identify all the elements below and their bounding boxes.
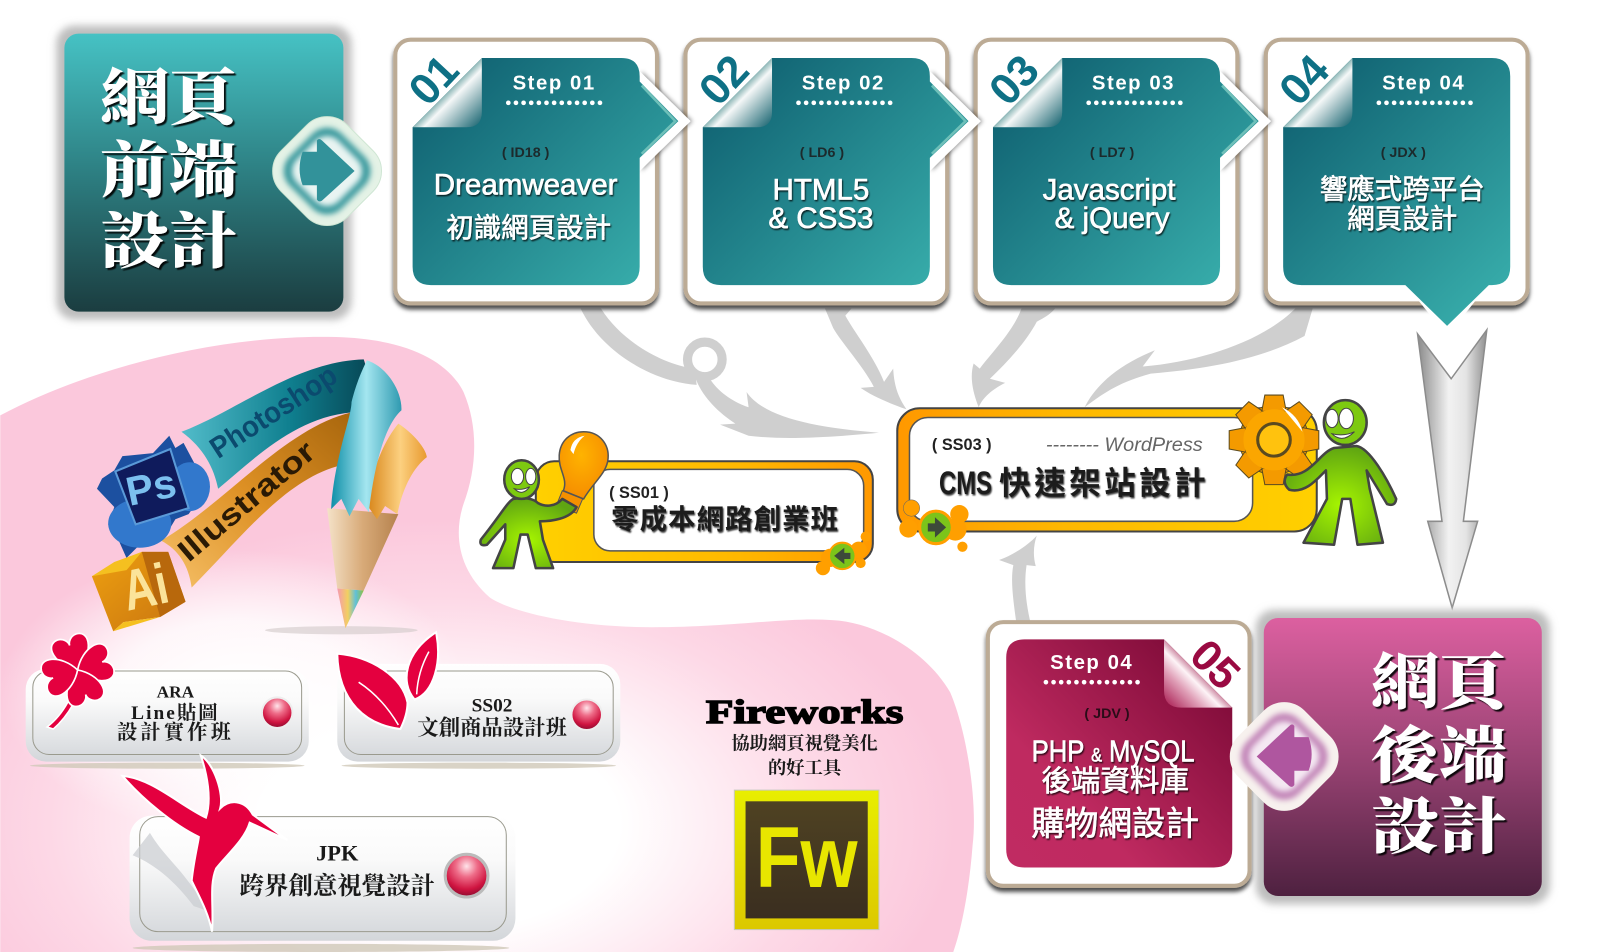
icon: Ps logo bbox=[97, 436, 210, 558]
heading: front-end design: 設計 bbox=[100, 210, 237, 277]
panel: front-end heading bbox=[56, 25, 352, 320]
ghost bird shadow bbox=[133, 833, 209, 911]
course code: ( SS03 ) bbox=[932, 436, 992, 454]
course name: 跨界創意視覺設計 bbox=[240, 872, 435, 900]
course name bbox=[417, 696, 567, 740]
course code: ( JDV ) bbox=[1084, 706, 1130, 722]
course name: 文創商品設計班 bbox=[417, 716, 567, 740]
heading: Fireworks: Fireworks bbox=[706, 694, 903, 731]
panel: SS02 button bbox=[337, 632, 620, 769]
course name: & jQuery bbox=[1055, 202, 1170, 235]
icon: Fw logo bbox=[734, 790, 879, 930]
blue paint curl bbox=[331, 360, 401, 516]
grey curved arrows into CMS bbox=[581, 309, 1313, 623]
icon: green man right bbox=[1285, 400, 1396, 545]
description: 協助網頁視覺美化 bbox=[731, 733, 878, 753]
course name: 網頁設計 bbox=[1347, 203, 1457, 234]
course name: 零成本網路創業班 bbox=[611, 503, 839, 534]
description bbox=[731, 733, 878, 778]
icon: red ball bbox=[571, 699, 602, 730]
heading: front-end design: 前端 bbox=[100, 138, 237, 205]
Photoshop ribbon: Photoshop bbox=[204, 359, 343, 465]
heading: back-end design bbox=[1371, 650, 1518, 862]
panel: step 03 card bbox=[976, 40, 1271, 303]
heading: front-end design: 網頁 bbox=[100, 65, 249, 133]
course name: 購物網設計 bbox=[1031, 805, 1199, 843]
course name bbox=[1043, 174, 1175, 235]
course code: ( SS01 ) bbox=[609, 484, 669, 502]
panel: JPK button bbox=[122, 755, 515, 952]
icon: green arrow button bbox=[899, 500, 969, 552]
icon: green man left bbox=[480, 460, 577, 568]
panel: step 01 card bbox=[395, 40, 691, 303]
course name: Dreamweaver bbox=[434, 168, 618, 201]
course name bbox=[768, 174, 873, 235]
course name: JPK bbox=[316, 840, 359, 865]
description: 的好工具 bbox=[768, 758, 844, 778]
icon: Fw logo: Fw bbox=[756, 810, 858, 906]
icon: Ai logo bbox=[92, 552, 186, 631]
icon: green arrow button bbox=[816, 531, 871, 575]
course code: ( ID18 ) bbox=[502, 145, 550, 161]
panel: step 05 card bbox=[988, 622, 1250, 886]
icon: left arrow diamond bbox=[1218, 690, 1350, 823]
step number 02: 02 bbox=[690, 46, 759, 115]
step title: Step 03 bbox=[1092, 73, 1175, 95]
panel: SS03 CMS banner bbox=[897, 395, 1396, 552]
course name bbox=[117, 682, 234, 744]
step title: Step 01 bbox=[513, 73, 596, 95]
pencil bbox=[327, 508, 398, 628]
Illustrator ribbon bbox=[161, 412, 352, 587]
icon: Ps logo: Ps bbox=[122, 459, 180, 515]
step number 04: 04 bbox=[1270, 45, 1339, 115]
course name bbox=[1031, 735, 1199, 843]
course name: HTML5 bbox=[773, 174, 869, 207]
panel: SS01 startup banner bbox=[480, 432, 873, 575]
heading: back-end design: 設計 bbox=[1371, 795, 1507, 862]
pink background blob bbox=[0, 337, 974, 952]
step title: Step 04 bbox=[1050, 652, 1133, 674]
course name: 響應式跨平台 bbox=[1320, 174, 1485, 205]
panel: step 04 card bbox=[1266, 40, 1528, 336]
course name: ARA bbox=[157, 682, 195, 701]
course code: ( JDX ) bbox=[1381, 145, 1426, 161]
step number 05: 05 bbox=[1180, 630, 1249, 699]
icon: Ai logo: Ai bbox=[117, 552, 174, 624]
icon: red ball bbox=[445, 854, 488, 897]
course name: Javascript bbox=[1043, 174, 1175, 207]
panel: Fireworks tool bbox=[706, 694, 903, 930]
WordPress note: -------- WordPress bbox=[1046, 434, 1203, 456]
course name bbox=[434, 168, 618, 243]
heading: back-end design: 網頁 bbox=[1371, 650, 1518, 718]
Photoshop ribbon bbox=[181, 359, 379, 489]
course name bbox=[240, 840, 435, 900]
icon: right arrow diamond bbox=[261, 105, 393, 237]
course code: ( LD7 ) bbox=[1090, 145, 1135, 161]
course name: CMS bbox=[939, 465, 992, 501]
icon: clover bbox=[39, 631, 116, 729]
icon: red ball bbox=[262, 697, 292, 728]
icon: gear bbox=[1229, 395, 1319, 485]
heading: front-end design bbox=[100, 65, 249, 277]
course code: ( LD6 ) bbox=[800, 145, 844, 161]
course name: 快速架站設計 bbox=[999, 465, 1209, 501]
icon: light bulb bbox=[556, 432, 608, 513]
panel: back-end heading bbox=[1256, 610, 1550, 904]
icon: hummingbird bbox=[122, 755, 287, 932]
course name: 初識網頁設計 bbox=[446, 212, 611, 243]
course name: 設計實作班 bbox=[117, 721, 234, 744]
arrow: big grey down arrow bbox=[1418, 330, 1487, 608]
step number 03: 03 bbox=[980, 46, 1049, 115]
course name: 後端資料庫 bbox=[1041, 765, 1189, 798]
Illustrator ribbon: Illustrator bbox=[171, 434, 322, 568]
step title: Step 04 bbox=[1382, 73, 1465, 95]
step title: Step 02 bbox=[802, 73, 885, 95]
course name: & CSS3 bbox=[768, 202, 873, 235]
heading: back-end design: 後端 bbox=[1371, 723, 1507, 791]
icon: leaves bbox=[337, 632, 438, 729]
course name: PHP & MySQL bbox=[1032, 735, 1195, 769]
course name: SS02 bbox=[472, 696, 512, 717]
step number 01: 01 bbox=[399, 46, 468, 115]
orange paint curl bbox=[368, 424, 427, 519]
panel: ARA button bbox=[26, 631, 309, 769]
ground shadow bbox=[265, 626, 418, 634]
illustration: Photoshop and Illustrator ribbons with pencil bbox=[92, 359, 427, 634]
course name: Line貼圖 bbox=[131, 702, 220, 724]
course name bbox=[1320, 174, 1485, 234]
panel: step 02 card bbox=[685, 40, 981, 303]
